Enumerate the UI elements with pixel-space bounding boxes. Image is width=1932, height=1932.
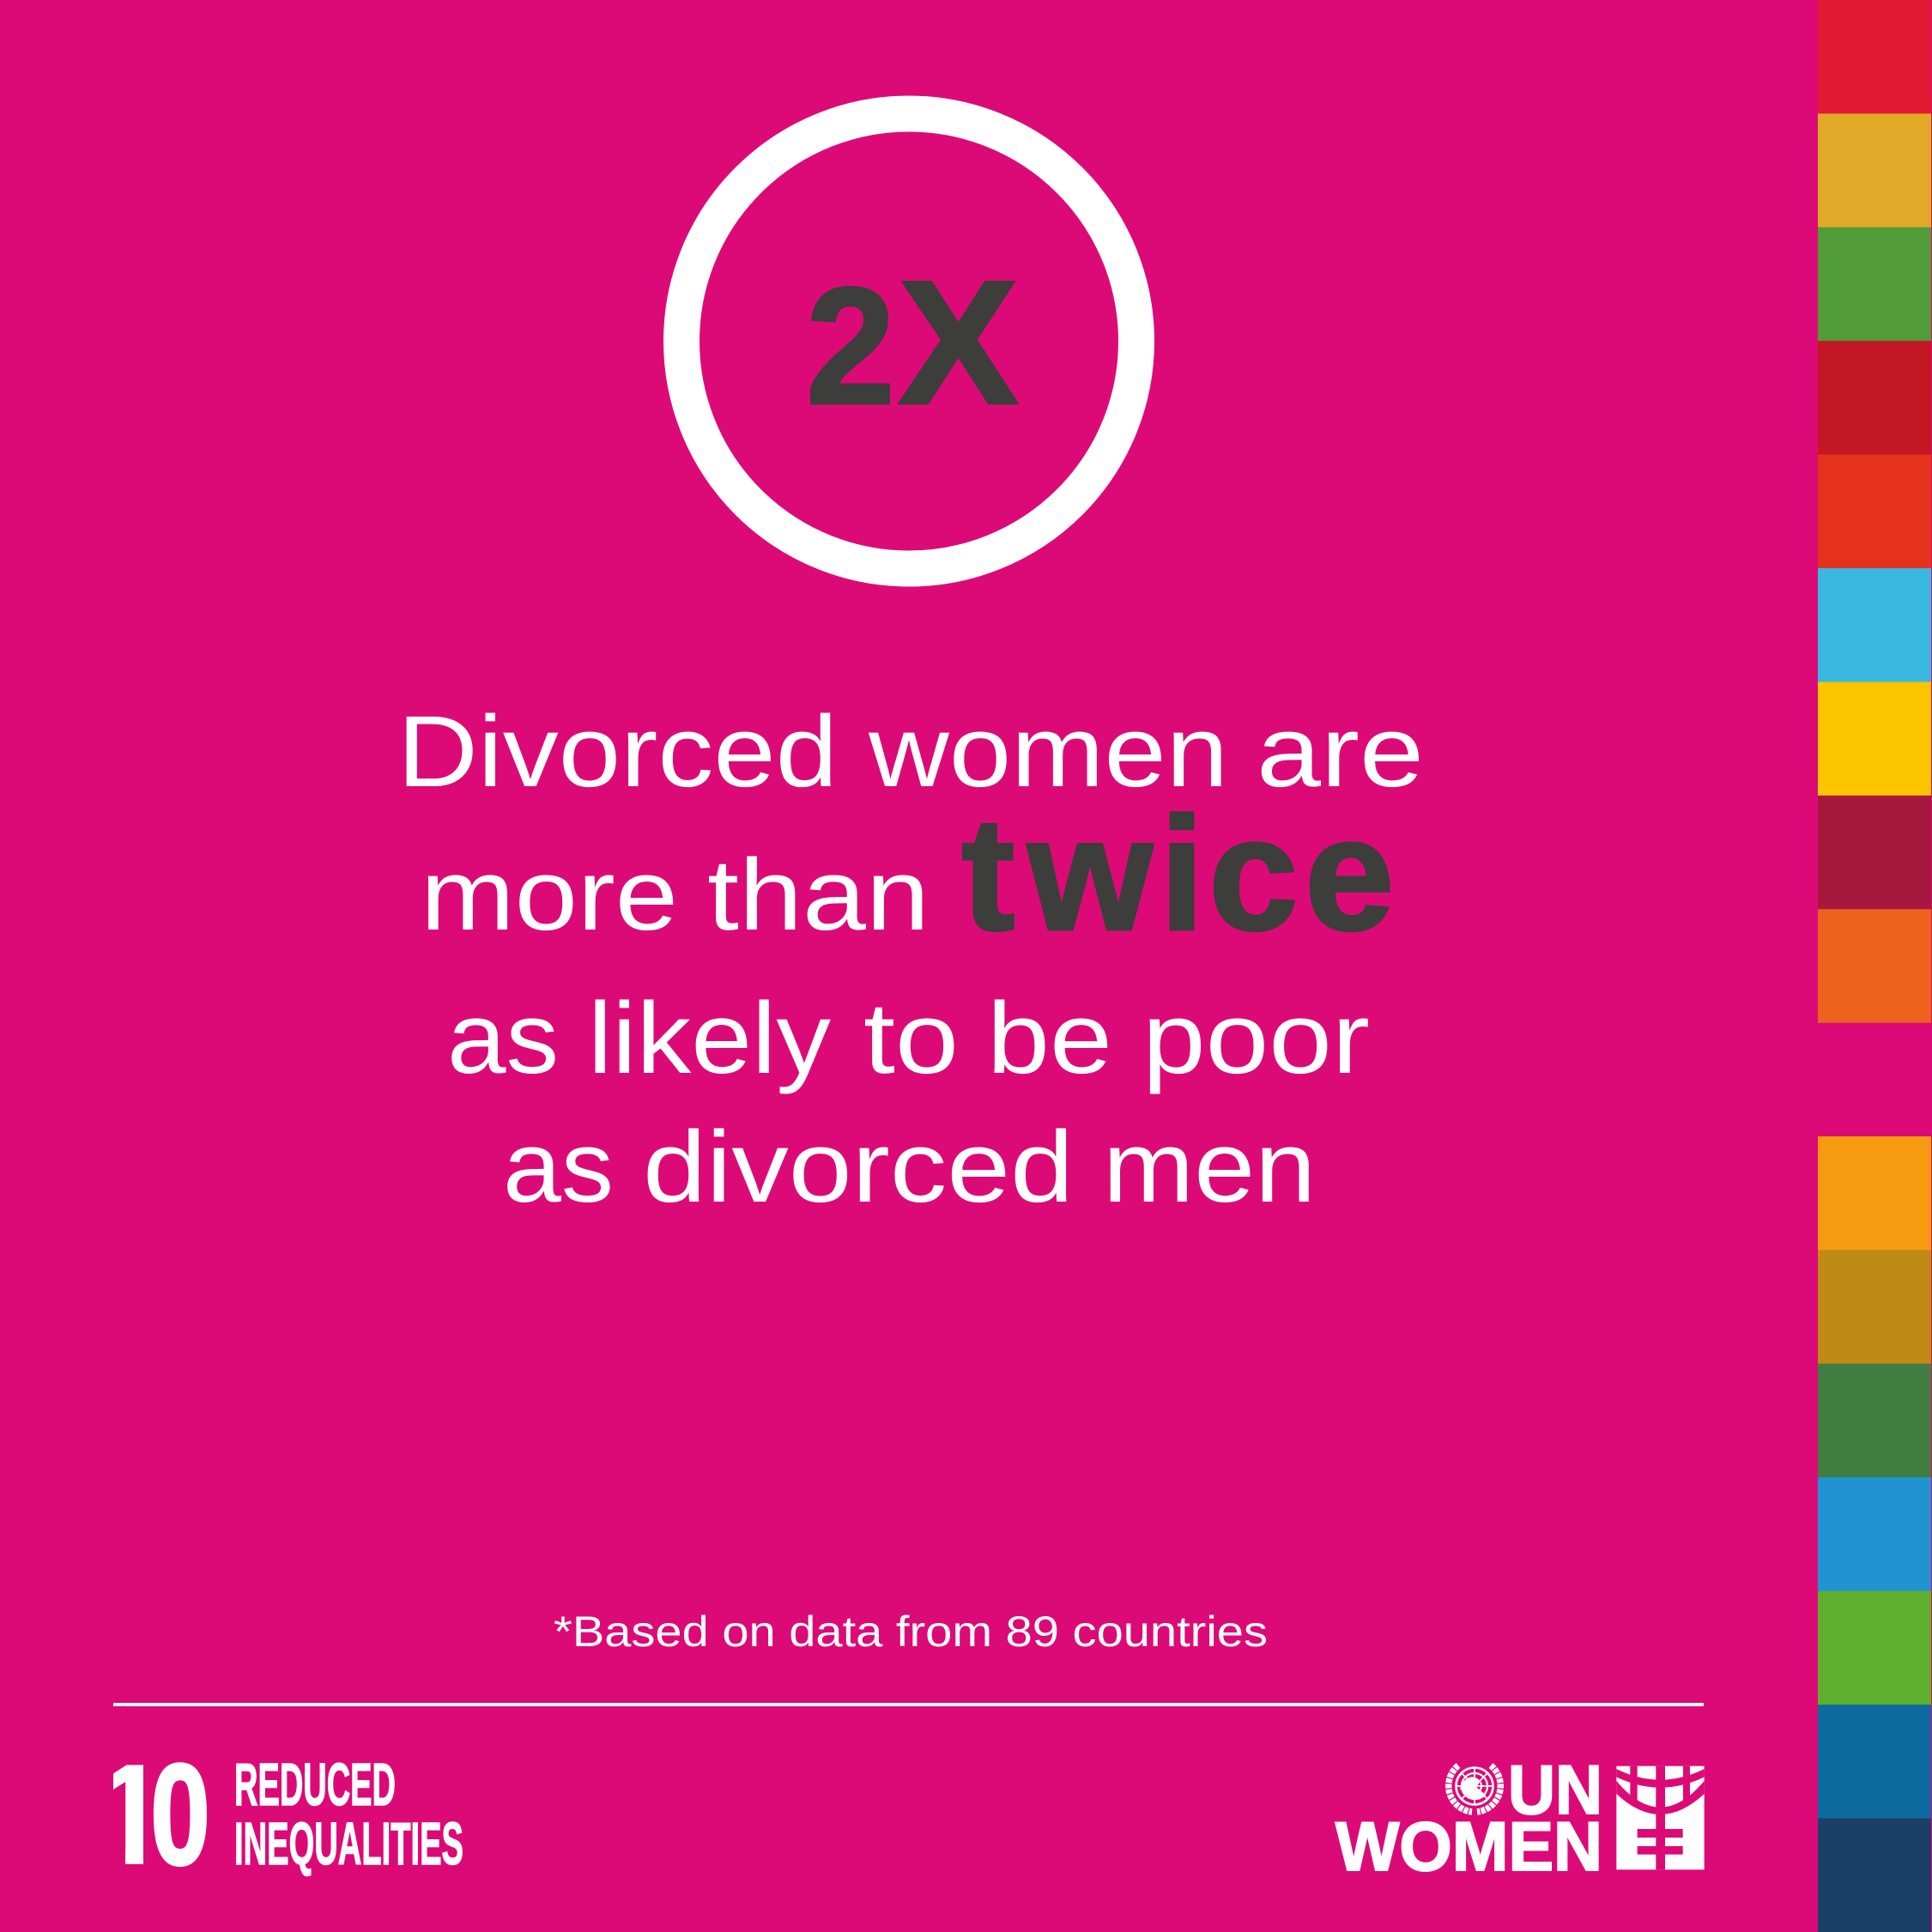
line 2 lead-in (421, 839, 930, 952)
line 3: be (987, 982, 1112, 1095)
stat circle with 2X (681, 113, 1136, 568)
wordmark: WOMEN: WOMEN (1335, 1808, 1602, 1886)
line 3: to (863, 982, 959, 1095)
line 3 (447, 982, 1370, 1095)
line 2 lead-in: more (421, 839, 678, 952)
icon: UN emblem (1449, 1765, 1500, 1812)
line 1: Divorced (397, 695, 838, 809)
line 1: are (1257, 695, 1424, 809)
goal number: 1 (92, 1734, 172, 1895)
UN Women logo (1335, 1752, 1705, 1886)
goal name line 2: INEQUALITIES (234, 1810, 463, 1877)
line 4: divorced (643, 1111, 1074, 1224)
line 2 lead-in: than (707, 839, 930, 952)
divider rule (113, 1703, 1704, 1706)
stat number: X (899, 245, 1018, 441)
wordmark: UN: UN (1508, 1752, 1602, 1829)
icon: globe and equals mark (1616, 1766, 1705, 1869)
line 4: as (503, 1111, 614, 1224)
ring (681, 113, 1136, 568)
line 3: likely (588, 982, 831, 1095)
SDG 10 label (113, 1762, 463, 1876)
main statement text (397, 695, 1424, 1224)
stat number (806, 245, 1018, 441)
line 3: poor (1142, 982, 1370, 1095)
goal number: 0 (150, 1734, 210, 1895)
goal name line 1: REDUCED (234, 1751, 396, 1818)
line 3: as (447, 982, 559, 1095)
line 1: women (868, 695, 1228, 809)
emphasised word: twice: twice (961, 784, 1395, 964)
line 1 (397, 695, 1424, 809)
goal number (113, 1762, 207, 1868)
line 4 (503, 1111, 1316, 1224)
SDG colour strip (1818, 0, 1931, 1932)
line 4: men (1103, 1111, 1316, 1224)
footnote: *Based on data from 89 countries (554, 1608, 1268, 1656)
stat number: 2 (806, 253, 895, 439)
